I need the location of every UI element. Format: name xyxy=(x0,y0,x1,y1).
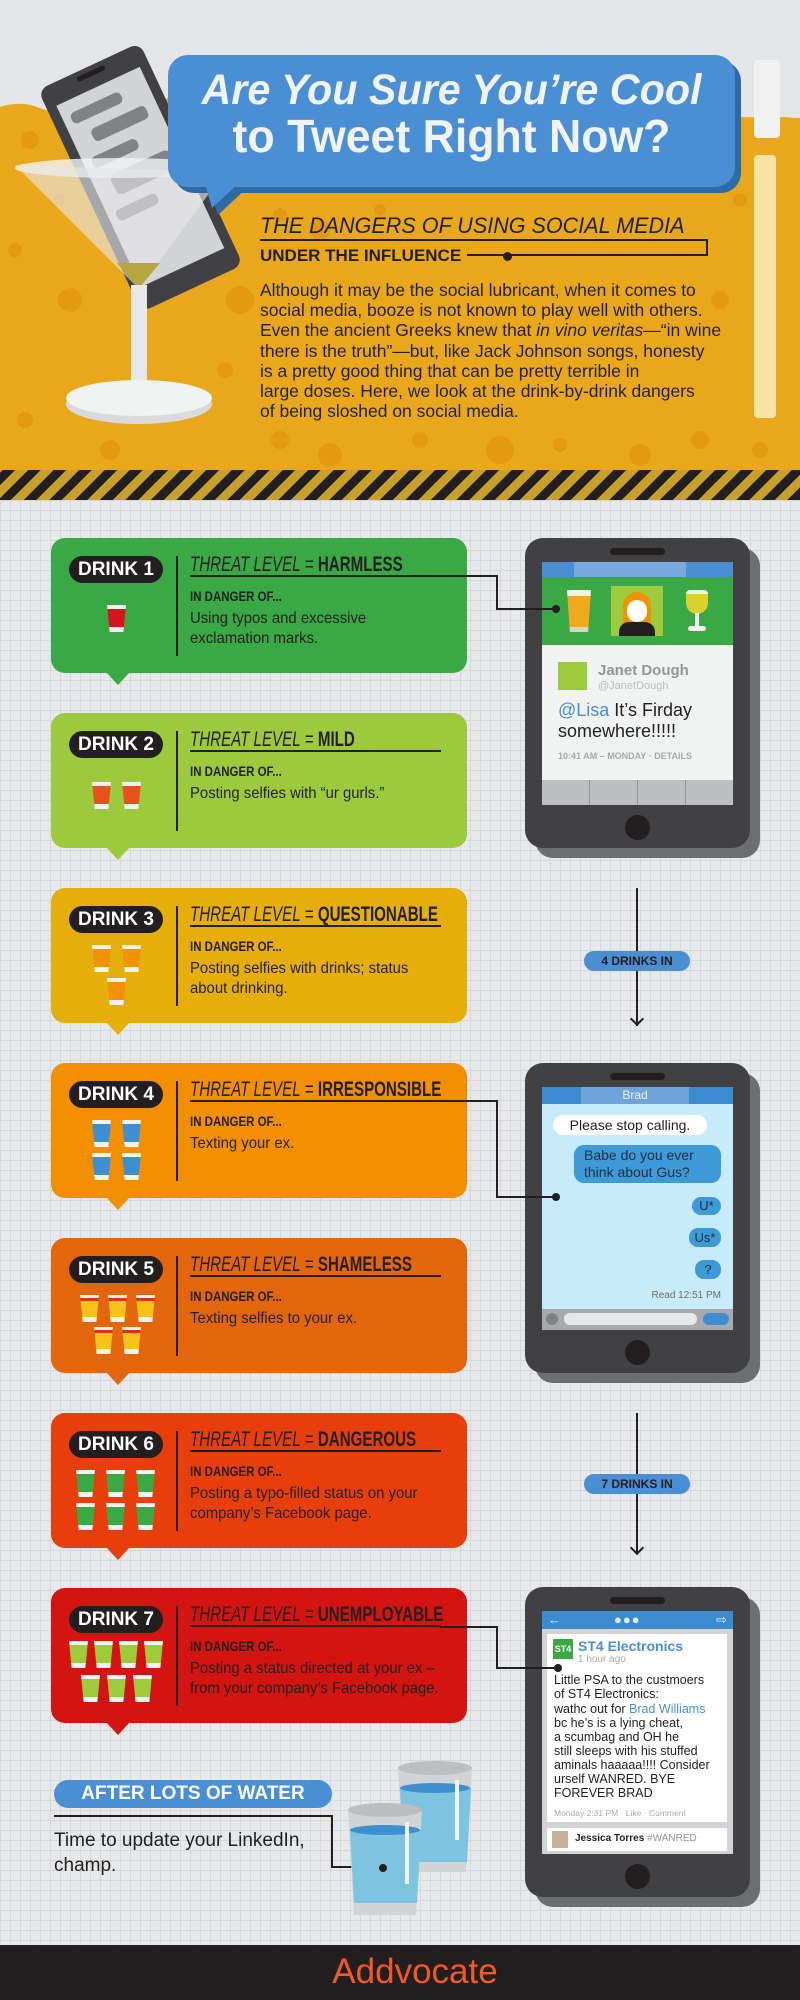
callout: after lots of water: champ. xyxy=(54,1855,116,1876)
phone 3: facebook post: ⇨ xyxy=(716,1612,727,1627)
panel: drink 2: DRINK 2 xyxy=(78,734,154,755)
phone 3: facebook post: bc he’s is a lying cheat, xyxy=(554,1716,683,1730)
icon: 7 cups xyxy=(69,1641,163,1702)
phone 2: texts: Please stop calling. xyxy=(570,1117,690,1133)
phone 3: facebook post: of ST4 Electronics: xyxy=(554,1687,659,1701)
phone 3: facebook post: Little PSA to the custmoers xyxy=(554,1673,704,1687)
callout: after lots of water: Time to update your LinkedIn, xyxy=(54,1830,305,1851)
connector: drink 1 to phone 1 xyxy=(441,575,560,613)
panel: drink 6: IN DANGER OF... xyxy=(190,1463,282,1479)
panel: drink 4: Texting your ex. xyxy=(190,1135,294,1152)
phone 2: texts: think about Gus? xyxy=(584,1164,690,1180)
panel: drink 3: about drinking. xyxy=(190,980,288,997)
panel: drink 2: THREAT LEVEL = MILD xyxy=(190,728,355,751)
panel: drink 2 xyxy=(51,713,467,848)
logo: Addvocate: Addvocate xyxy=(332,1952,498,1991)
panel: drink 1: THREAT LEVEL = HARMLESS xyxy=(190,553,403,576)
panel: drink 7: DRINK 7 xyxy=(78,1609,154,1630)
panel: drink 1 xyxy=(51,538,467,673)
icon: avatar xyxy=(611,586,663,636)
intro text: of being sloshed on social media. xyxy=(260,401,519,421)
subtitle: THE DANGERS OF USING SOCIAL MEDIA xyxy=(260,213,685,238)
phone 3: facebook post: ST4 xyxy=(555,1644,571,1654)
panel: drink 6: company’s Facebook page. xyxy=(190,1505,372,1522)
phone 2: texts xyxy=(525,1063,760,1383)
phone 2: texts: U* xyxy=(699,1198,714,1213)
panel: drink 3: THREAT LEVEL = QUESTIONABLE xyxy=(190,903,438,926)
header background xyxy=(0,60,800,470)
panel: drink 5: THREAT LEVEL = SHAMELESS xyxy=(190,1253,412,1276)
phone 1: tweet xyxy=(525,538,760,858)
panel: drink 1: exclamation marks. xyxy=(190,630,318,647)
phone 3: facebook post xyxy=(525,1587,760,1907)
title: Are You Sure You’re Cool xyxy=(201,66,702,114)
phone 3: facebook post: wathc out for Brad Williams xyxy=(554,1702,705,1716)
phone 3: facebook post: still sleeps with his stuffed xyxy=(554,1744,698,1758)
phone 3: facebook post: Jessica Torres #WANRED xyxy=(575,1833,697,1844)
icon: water glasses xyxy=(348,1761,472,1915)
icon: 1 cup xyxy=(107,605,126,632)
phone 3: facebook post: urself WANRED. BYE xyxy=(554,1772,675,1786)
callout: after lots of water xyxy=(54,1780,352,1876)
phone 2: texts: Brad xyxy=(622,1088,648,1102)
panel: drink 2: IN DANGER OF... xyxy=(190,763,282,779)
panel: drink 7: from your company’s Facebook page. xyxy=(190,1680,439,1697)
title: to Tweet Right Now? xyxy=(233,110,670,162)
footer xyxy=(0,1945,800,2000)
panel: drink 6 xyxy=(51,1413,467,1548)
icon: 6 cups xyxy=(76,1470,155,1530)
phone 3: facebook post: Monday 2:31 PM · Like · Comment xyxy=(554,1808,686,1818)
icon: 2 cups xyxy=(92,782,141,809)
phone 1: tweet: Janet Dough xyxy=(598,662,689,679)
panel: drink 3: Posting selfies with drinks; status xyxy=(190,960,408,977)
arrow: 4 drinks in: 4 DRINKS IN xyxy=(601,954,673,968)
phone 3: facebook post: ●●● xyxy=(614,1612,641,1627)
panel: drink 5: DRINK 5 xyxy=(78,1259,154,1280)
arrow: 4 drinks in xyxy=(584,888,690,1026)
title bubble xyxy=(168,55,741,215)
panel: drink 5: IN DANGER OF... xyxy=(190,1288,282,1304)
phone 2: texts: ? xyxy=(704,1262,712,1277)
panel: drink 5 xyxy=(51,1238,467,1373)
intro text: social media, booze is not known to play well with others. xyxy=(260,300,703,320)
icon: 3 cups xyxy=(92,945,141,1005)
phone 2: texts: Us* xyxy=(695,1230,715,1245)
phone 1: tweet: 10:41 AM – MONDAY · DETAILS xyxy=(558,751,692,761)
intro text: is a pretty good thing that can be pretty terrible in xyxy=(260,361,639,381)
panel: drink 7 xyxy=(51,1588,467,1723)
hazard stripes xyxy=(0,470,800,500)
panel: drink 4: IN DANGER OF... xyxy=(190,1113,282,1129)
grid background xyxy=(0,500,800,1945)
phone 3: facebook post: a scumbag and OH he xyxy=(554,1730,679,1744)
panel: drink 5: Texting selfies to your ex. xyxy=(190,1310,357,1327)
callout: after lots of water: AFTER LOTS OF WATER xyxy=(81,1783,305,1804)
intro text xyxy=(260,280,721,421)
subtitle: UNDER THE INFLUENCE xyxy=(260,246,461,265)
panel: drink 3: IN DANGER OF... xyxy=(190,938,282,954)
phone 1: tweet: somewhere!!!!! xyxy=(558,721,676,741)
panel: drink 1: IN DANGER OF... xyxy=(190,588,282,604)
panel: drink 6: THREAT LEVEL = DANGEROUS xyxy=(190,1428,416,1451)
panel: drink 4 xyxy=(51,1063,467,1198)
panel: drink 2: Posting selfies with “ur gurls.” xyxy=(190,785,384,802)
phone 1: tweet: @JanetDough xyxy=(598,680,668,692)
phone 3: facebook post: aminals haaaaa!!!! Consider xyxy=(554,1758,710,1772)
title xyxy=(200,66,702,162)
panel: drink 1: DRINK 1 xyxy=(78,559,154,580)
icon: wine glass xyxy=(686,590,708,631)
panel: drink 4: DRINK 4 xyxy=(78,1084,154,1105)
straw xyxy=(754,60,780,138)
intro text: Even the ancient Greeks knew that in vino veritas—“in wine xyxy=(260,320,721,340)
panel: drink 7: IN DANGER OF... xyxy=(190,1638,282,1654)
connector: drink 4 to phone 2 xyxy=(441,1100,560,1201)
arrow: 7 drinks in: 7 DRINKS IN xyxy=(601,1477,673,1491)
panel: drink 4: THREAT LEVEL = IRRESPONSIBLE xyxy=(190,1078,441,1101)
phone 3: facebook post: 1 hour ago xyxy=(578,1654,626,1665)
panel: drink 3: DRINK 3 xyxy=(78,909,154,930)
panel: drink 6: Posting a typo-filled status on your xyxy=(190,1485,417,1502)
phone 3: facebook post: ← xyxy=(548,1612,561,1627)
arrow: 7 drinks in xyxy=(584,1413,690,1556)
panel: drink 6: DRINK 6 xyxy=(78,1434,154,1455)
icon: beer xyxy=(567,590,591,632)
intro text: there is the truth”—but, like Jack Johnson songs, honesty xyxy=(260,341,705,361)
intro text: Although it may be the social lubricant, when it comes to xyxy=(260,280,696,300)
phone 3: facebook post: ST4 Electronics xyxy=(578,1638,683,1654)
intro text: large doses. Here, we look at the drink-by-drink dangers xyxy=(260,381,695,401)
icon: phone in martini glass xyxy=(15,46,240,424)
phone 2: texts: Read 12:51 PM xyxy=(652,1290,721,1301)
icon: 5 cups xyxy=(80,1295,155,1354)
panel: drink 7: THREAT LEVEL = UNEMPLOYABLE xyxy=(190,1603,443,1626)
icon: 4 cups xyxy=(92,1120,141,1180)
phone 1: tweet: @Lisa It’s Firday xyxy=(558,700,692,720)
phone 3: facebook post: FOREVER BRAD xyxy=(554,1786,653,1800)
panel: drink 3 xyxy=(51,888,467,1023)
panel: drink 7: Posting a status directed at your ex – xyxy=(190,1660,435,1677)
phone 2: texts: Babe do you ever xyxy=(584,1147,694,1163)
subtitle xyxy=(260,213,708,265)
panel: drink 1: Using typos and excessive xyxy=(190,610,366,627)
connector: drink 7 to phone 3 xyxy=(440,1626,562,1672)
